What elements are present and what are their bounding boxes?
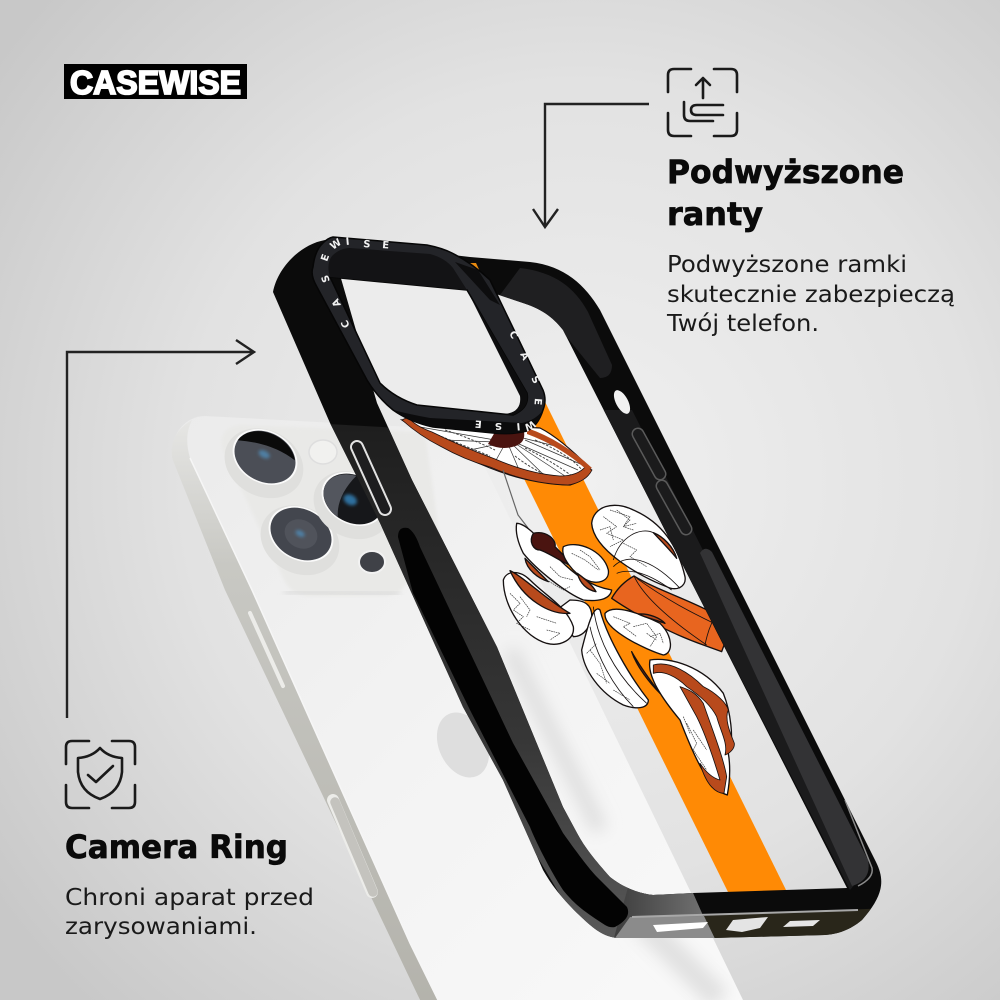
bottom olive strip: [704, 908, 871, 938]
top right band: [500, 268, 612, 378]
text: raised edges description: Podwyższone ramki: [667, 252, 907, 278]
heading: Podwyższone ranty: ranty: [667, 195, 763, 233]
heading: Podwyższone ranty: [667, 153, 904, 233]
lens right: [302, 458, 402, 552]
text: camera ring description: zarysowaniami.: [65, 914, 257, 940]
icon: shield: [66, 741, 135, 808]
ring inner wall: [328, 248, 467, 290]
logo: CASEWISE: [70, 64, 241, 101]
artwork: umbrella: [402, 417, 592, 528]
artwork: kimono figure: [503, 505, 734, 795]
bottom grey band: [614, 888, 703, 938]
text: raised edges description: [666, 252, 955, 337]
case frame: [260, 230, 900, 950]
skirt centre: [582, 609, 648, 708]
black inner channel: [398, 528, 628, 927]
right side buttons: [611, 388, 686, 529]
camera plateau: [221, 425, 440, 596]
flash: [309, 440, 337, 464]
arrow: top: [533, 104, 649, 227]
back phone: [172, 415, 743, 1000]
text: camera ring description: [65, 885, 314, 940]
umbrella cord: [503, 470, 528, 528]
text: raised edges description: Twój telefon.: [666, 311, 819, 337]
arrow: left: [67, 340, 254, 718]
apple logo: [427, 704, 499, 786]
lens top: [212, 415, 316, 512]
sleeve centre: [563, 545, 608, 582]
left translucent band: [328, 424, 716, 945]
orange stripe: [417, 262, 787, 892]
right band: [603, 410, 866, 890]
side button upper: [250, 613, 283, 686]
kimono pattern scribbles: [510, 510, 707, 770]
text: camera ring description: Chroni aparat przed: [65, 885, 314, 911]
side button lower: [333, 800, 372, 892]
ring engraving left: CASEWISE: [319, 237, 390, 329]
right edge highlight: [845, 800, 872, 886]
camera ring: [312, 237, 545, 434]
head and body: [516, 523, 612, 601]
orange sleeve: [612, 576, 729, 652]
lidar sensor: [359, 551, 385, 573]
port holes: [653, 922, 708, 932]
volume button slot: [357, 447, 385, 509]
robe hem: [650, 659, 731, 795]
sleeve left: [557, 600, 592, 637]
stripe glimpse above ring: [466, 263, 484, 280]
phone side strip: [172, 420, 438, 1000]
heading: Podwyższone ranty: Podwyższone: [667, 153, 904, 191]
ring window clear area: [330, 277, 527, 415]
bottom highlight: [632, 910, 858, 917]
lens bottom: [248, 492, 352, 589]
icon: raised edges: [668, 69, 737, 136]
sleeve upper right: [592, 505, 685, 589]
side hole: [611, 388, 633, 416]
bottom left port strip: [615, 916, 714, 938]
sleeve lower right: [605, 609, 670, 655]
text: raised edges description: skutecznie zabezpieczą: [667, 282, 955, 308]
ring engraving right: CASEWISE: [474, 329, 543, 432]
soft shadow inside case: [510, 650, 720, 1000]
heading: Camera Ring: Camera Ring: [65, 828, 288, 866]
